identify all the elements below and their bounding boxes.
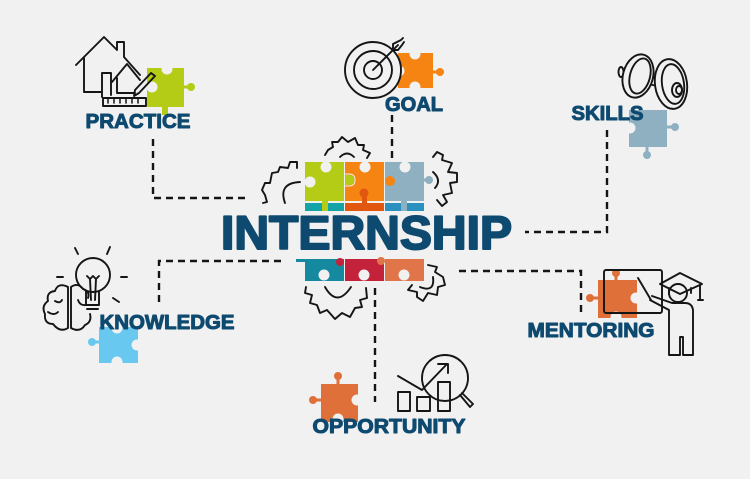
connector: mentoring	[459, 271, 581, 312]
gear: bottom large	[305, 287, 367, 319]
connector: goal	[391, 115, 393, 160]
puzzle: opportunity	[309, 372, 362, 424]
title: INTERNSHIP	[221, 206, 512, 259]
puzzle: practice	[146, 64, 195, 115]
group: goal	[345, 38, 444, 116]
label: goal: GOAL	[385, 94, 443, 116]
gear: top	[325, 137, 370, 158]
central gears and puzzle	[262, 137, 457, 319]
group: opportunity	[309, 355, 473, 438]
label: opportunity: OPPORTUNITY	[312, 416, 466, 438]
label: practice: PRACTICE	[86, 110, 190, 133]
puzzle: bottom row	[296, 257, 424, 281]
group: skills	[572, 51, 690, 159]
gear: bottom small	[408, 265, 445, 301]
puzzle: top row	[304, 162, 433, 211]
icon: dumbbell	[618, 51, 690, 111]
connector: practice	[153, 139, 247, 198]
group: knowledge	[44, 247, 234, 368]
puzzle: knowledge	[88, 322, 142, 368]
label: knowledge: KNOWLEDGE	[100, 312, 234, 334]
group: practice	[76, 37, 195, 133]
icon: teacher at board	[604, 270, 703, 355]
label: mentoring: MENTORING	[528, 320, 654, 342]
icon: house plan	[76, 37, 155, 106]
puzzle: mentoring	[586, 269, 642, 322]
puzzle: goal	[394, 48, 444, 92]
puzzle: skills	[624, 110, 679, 159]
connector: opportunity	[374, 288, 376, 402]
icon: target	[345, 38, 404, 98]
connector: knowledge	[159, 261, 284, 302]
icon: bulb and brain	[44, 247, 127, 330]
icon: chart and magnifier	[398, 355, 473, 411]
group: mentoring	[528, 269, 703, 355]
gear: right	[433, 152, 457, 206]
gear: left	[262, 162, 300, 203]
connector: skills	[525, 130, 607, 232]
label: skills: SKILLS	[572, 103, 644, 125]
